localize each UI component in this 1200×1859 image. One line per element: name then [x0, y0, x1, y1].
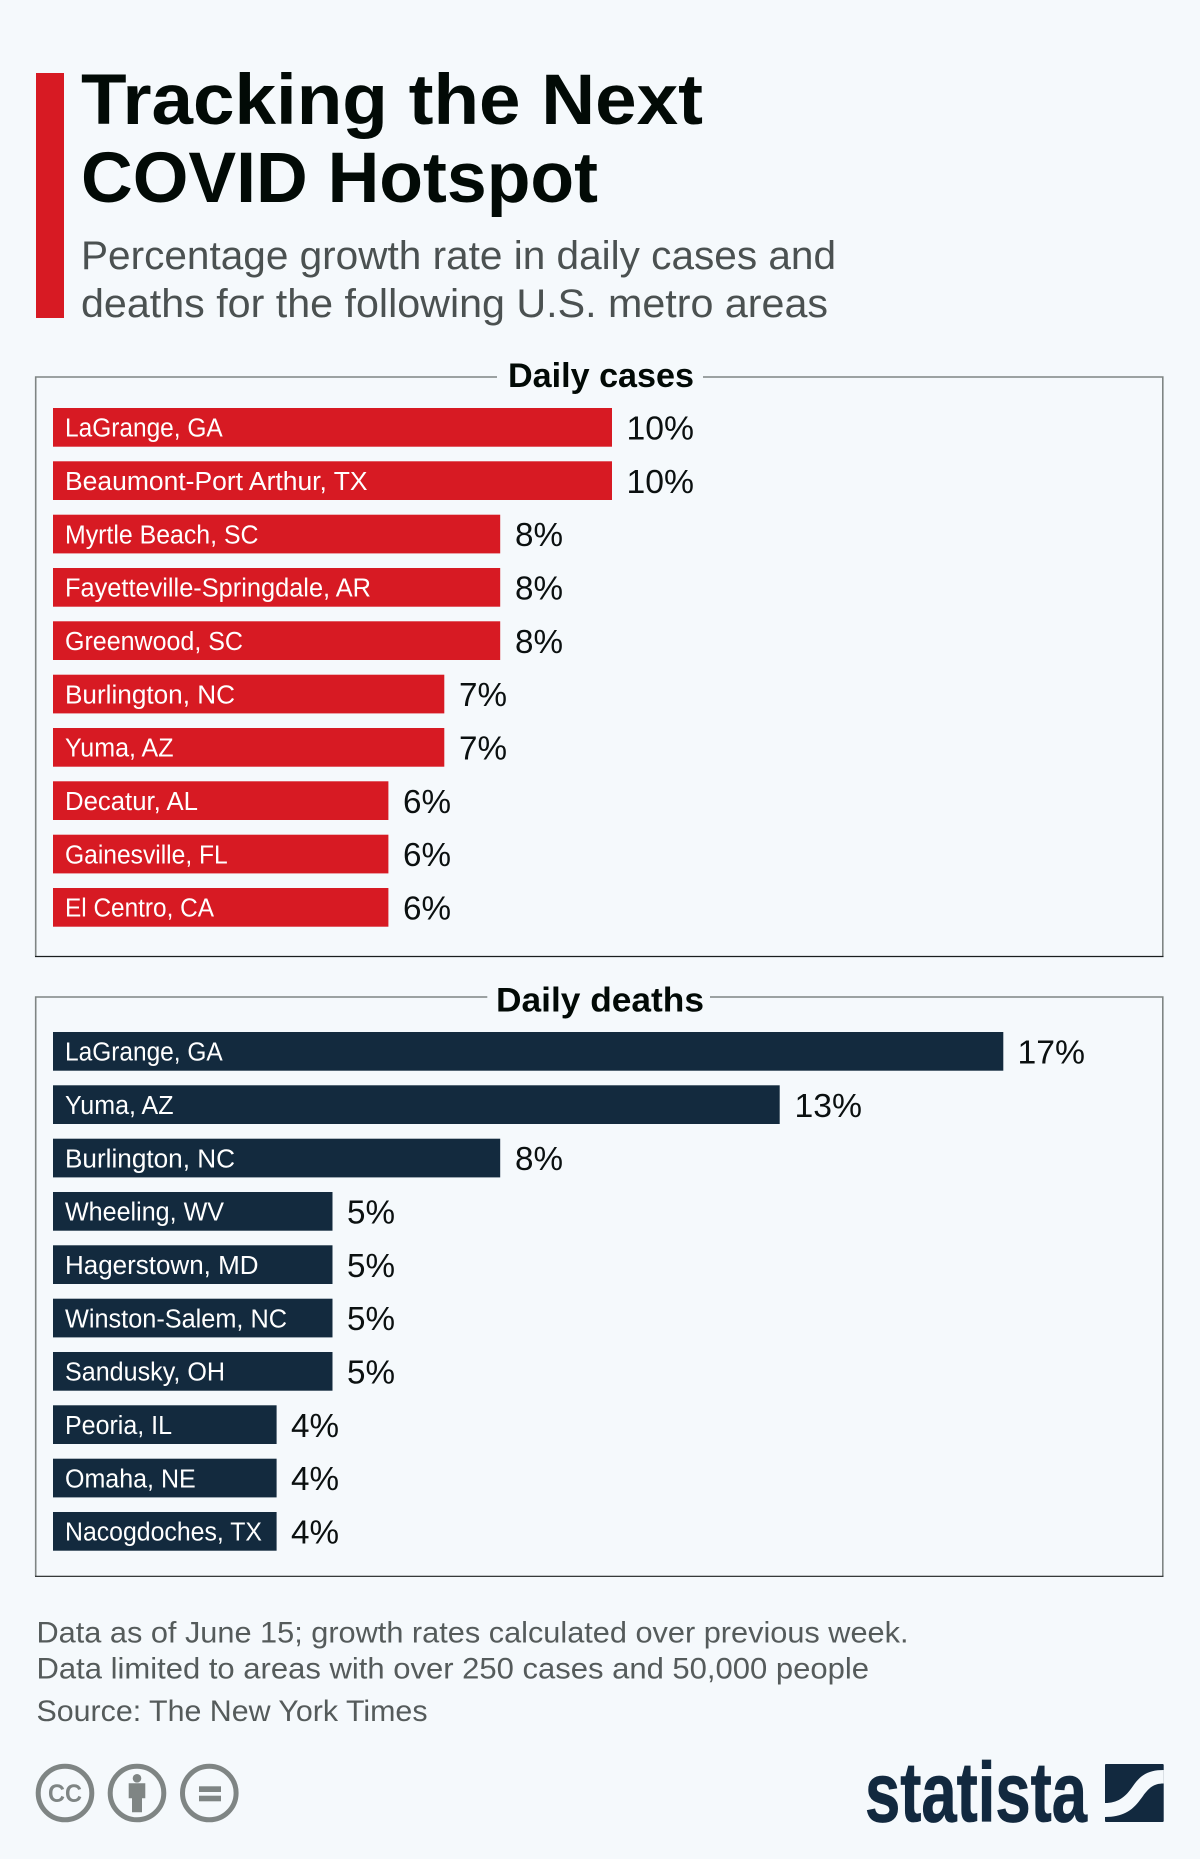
row: Yuma, AZ: 7%: [459, 730, 507, 766]
row: Omaha, NE: 4%: [291, 1460, 339, 1497]
row: Yuma, AZ: Yuma, AZ: [65, 735, 174, 763]
logo mark: [1105, 1764, 1164, 1822]
icon: cc: [38, 1766, 92, 1820]
row: Peoria, IL: Peoria, IL: [65, 1412, 172, 1440]
row: Hagerstown, MD: Hagerstown, MD: [65, 1252, 258, 1280]
row: Burlington, NC: Burlington, NC: [65, 1145, 235, 1173]
logo wordmark: statista: [865, 1746, 1088, 1840]
row: Peoria, IL: [53, 1405, 339, 1444]
footnote and source: [36, 1617, 908, 1728]
footnote and source: Source: The New York Times: [36, 1695, 427, 1728]
row: Nacogdoches, TX: 4%: [291, 1514, 339, 1550]
row: Yuma, AZ: [53, 1085, 862, 1124]
row: Beaumont-Port Arthur, TX: 10%: [626, 463, 694, 500]
panel: daily cases: [35, 357, 1164, 956]
row: Decatur, AL: Decatur, AL: [65, 788, 198, 816]
row: Greenwood, SC: Greenwood, SC: [65, 628, 243, 656]
row: Nacogdoches, TX: [53, 1512, 339, 1551]
row: Wheeling, WV: [53, 1192, 395, 1231]
row: Gainesville, FL: 6%: [403, 836, 451, 873]
row: Beaumont-Port Arthur, TX: [53, 461, 694, 500]
subtitle: [81, 234, 836, 326]
title: COVID Hotspot: [81, 139, 598, 218]
row: LaGrange, GA: 10%: [626, 410, 694, 446]
row: Gainesville, FL: Gainesville, FL: [65, 841, 228, 869]
heading: daily deaths: Daily deaths: [496, 982, 704, 1020]
row: Myrtle Beach, SC: 8%: [515, 516, 563, 553]
row: Fayetteville-Springdale, AR: [53, 568, 563, 607]
subtitle: deaths for the following U.S. metro areas: [81, 282, 828, 326]
row: Omaha, NE: [53, 1459, 339, 1497]
footnote and source: Data as of June 15; growth rates calculated over previous week.: [36, 1617, 908, 1650]
title: [81, 61, 703, 218]
row: Gainesville, FL: [53, 835, 451, 873]
row: Omaha, NE: Omaha, NE: [65, 1465, 196, 1493]
row: El Centro, CA: El Centro, CA: [65, 895, 214, 923]
title: Tracking the Next: [81, 61, 703, 140]
subtitle: Percentage growth rate in daily cases and: [81, 234, 836, 278]
row: Fayetteville-Springdale, AR: Fayetteville-Springdale, AR: [65, 575, 371, 603]
row: Myrtle Beach, SC: Myrtle Beach, SC: [65, 521, 258, 549]
row: Beaumont-Port Arthur, TX: Beaumont-Port Arthur, TX: [65, 468, 368, 496]
row: Myrtle Beach, SC: [53, 515, 563, 553]
row: LaGrange, GA: 17%: [1018, 1034, 1085, 1070]
row: Decatur, AL: [53, 781, 451, 820]
row: Peoria, IL: 4%: [291, 1407, 339, 1444]
logo: statista: [865, 1746, 1164, 1840]
panel: daily deaths: [35, 982, 1164, 1576]
row: Yuma, AZ: 13%: [794, 1087, 862, 1124]
row: Burlington, NC: Burlington, NC: [65, 681, 235, 709]
row: Winston-Salem, NC: [53, 1299, 395, 1337]
row: Greenwood, SC: 8%: [515, 623, 563, 660]
row: LaGrange, GA: LaGrange, GA: [65, 415, 223, 443]
row: Winston-Salem, NC: Winston-Salem, NC: [65, 1305, 287, 1333]
row: El Centro, CA: [53, 888, 451, 927]
row: Sandusky, OH: Sandusky, OH: [65, 1359, 225, 1387]
icon: attribution person: [110, 1766, 164, 1820]
row: Burlington, NC: [53, 1139, 563, 1177]
row: Sandusky, OH: [53, 1352, 395, 1391]
row: Greenwood, SC: [53, 621, 563, 660]
row: Burlington, NC: 8%: [515, 1140, 563, 1177]
row: LaGrange, GA: LaGrange, GA: [65, 1039, 223, 1067]
row: Yuma, AZ: [53, 728, 507, 767]
row: Decatur, AL: 6%: [403, 783, 451, 820]
row: Nacogdoches, TX: Nacogdoches, TX: [65, 1519, 262, 1547]
icon: creative commons licence: [38, 1766, 236, 1820]
row: Sandusky, OH: 5%: [347, 1354, 395, 1390]
row: Burlington, NC: [53, 675, 507, 713]
row: LaGrange, GA: [53, 1032, 1085, 1071]
icon: no derivatives equals: [182, 1766, 236, 1820]
row: Hagerstown, MD: [53, 1245, 395, 1284]
row: Wheeling, WV: Wheeling, WV: [65, 1199, 224, 1227]
row: Burlington, NC: 7%: [459, 676, 507, 713]
footnote and source: Data limited to areas with over 250 cases and 50,000 people: [36, 1653, 869, 1686]
row: Hagerstown, MD: 5%: [347, 1247, 395, 1284]
row: Fayetteville-Springdale, AR: 8%: [515, 570, 563, 606]
heading: daily cases: Daily cases: [508, 357, 694, 395]
row: Wheeling, WV: 5%: [347, 1194, 395, 1230]
row: LaGrange, GA: [53, 408, 694, 447]
icon: cc: CC: [48, 1780, 82, 1808]
row: Winston-Salem, NC: 5%: [347, 1300, 395, 1337]
row: El Centro, CA: 6%: [403, 890, 451, 926]
header accent bar: [36, 73, 64, 318]
row: Yuma, AZ: Yuma, AZ: [65, 1092, 174, 1120]
